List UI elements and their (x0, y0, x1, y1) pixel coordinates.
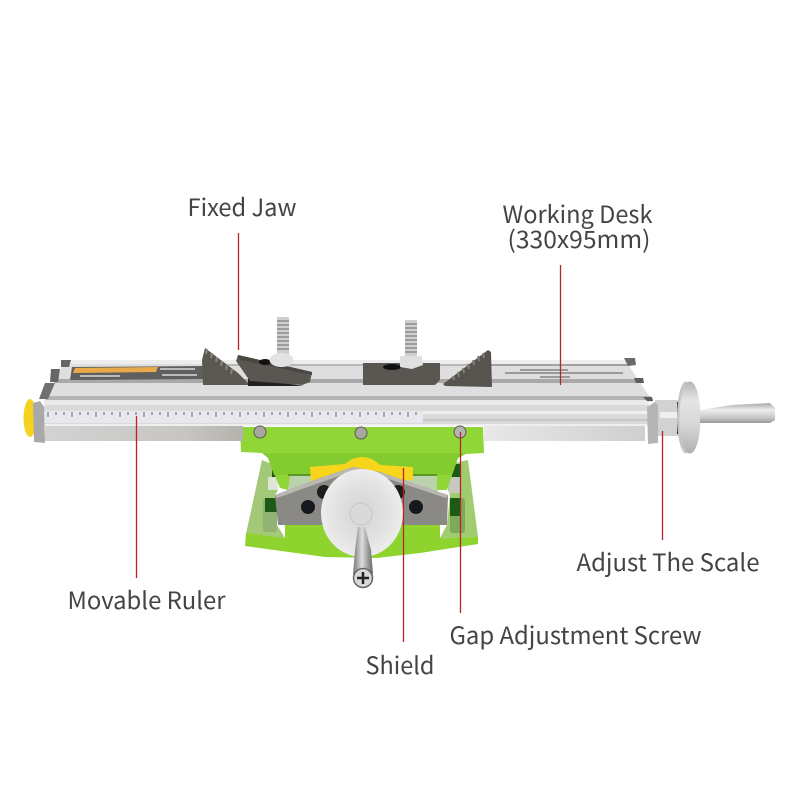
leader line: adjust the scale (662, 431, 664, 540)
label: working desk: Working Desk (502, 195, 652, 230)
pale side walls (246, 460, 285, 538)
green cross slide base (240, 427, 484, 558)
leader line: movable ruler (136, 416, 138, 578)
front carriage (275, 457, 448, 588)
upper openings (272, 466, 278, 477)
movable ruler scale (44, 411, 423, 423)
side windows (263, 498, 277, 532)
saddle block (288, 470, 438, 494)
leader line: fixed jaw (238, 233, 240, 350)
yellow shield (310, 457, 413, 482)
bolt (277, 317, 289, 355)
label: working desk size: (330x95mm) (508, 220, 650, 255)
clamp block (236, 355, 312, 385)
bolt (405, 320, 417, 357)
front foot (245, 525, 478, 558)
stepped jaw (202, 348, 250, 385)
label: movable ruler: Movable Ruler (68, 581, 226, 616)
nut (400, 356, 423, 369)
label: shield: Shield (366, 646, 434, 681)
crank shaft (353, 527, 373, 574)
label: fixed jaw: Fixed Jaw (188, 188, 296, 223)
nut (270, 353, 294, 367)
leader line: gap adjustment screw (460, 432, 462, 613)
knob disc (321, 469, 403, 557)
handwheel right (647, 382, 775, 454)
clamp block (363, 363, 440, 385)
top green plate (240, 427, 484, 490)
label strip on rear rail (70, 366, 204, 380)
grey bracket (275, 467, 448, 525)
clamp shadow (248, 378, 304, 386)
fixed jaw right (363, 320, 492, 387)
plate screws (254, 426, 466, 439)
top face (44, 360, 653, 402)
table body (44, 360, 653, 441)
leader line: shield (402, 468, 404, 642)
lower shadowed rail (484, 426, 645, 441)
working desk engraved text (505, 369, 623, 378)
label: adjust the scale: Adjust The Scale (576, 543, 760, 578)
front face (44, 405, 648, 426)
left end: yellow cap and plate (24, 360, 71, 443)
fixed jaw left (202, 317, 312, 386)
right end rail stops (624, 358, 653, 401)
label: gap adjustment screw: Gap Adjustment Screw (450, 616, 702, 651)
leader line: working desk (560, 265, 562, 385)
stepped jaw (443, 350, 492, 387)
